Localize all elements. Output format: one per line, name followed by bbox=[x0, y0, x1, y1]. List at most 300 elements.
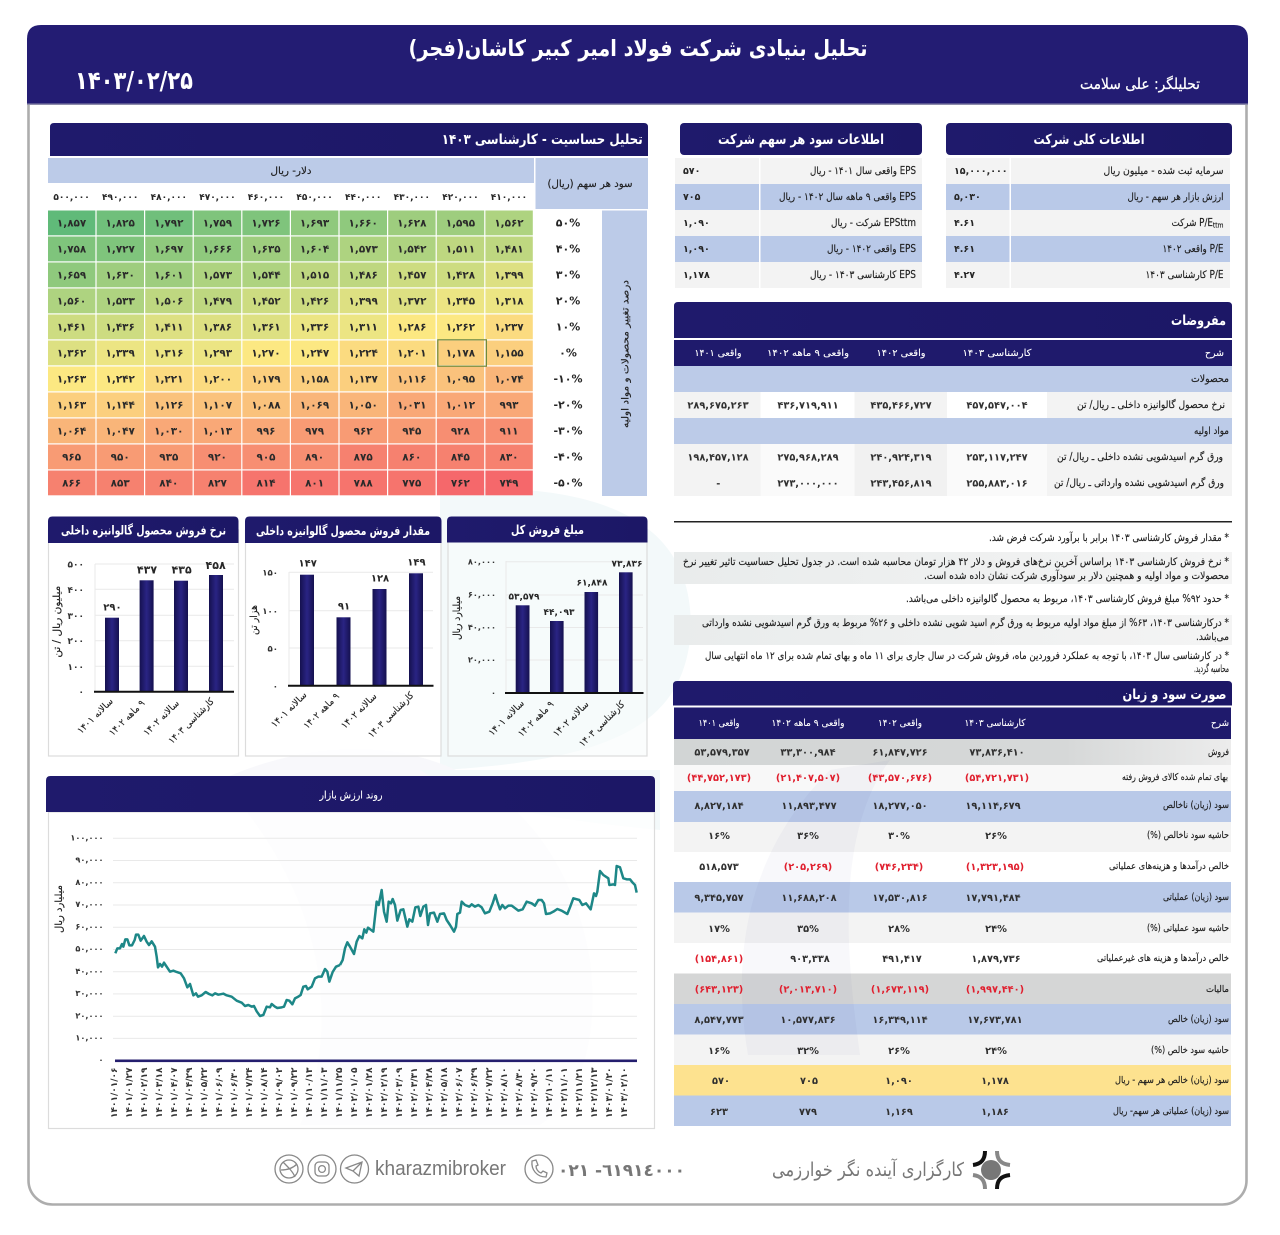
panel: income statement: ۳۳,۳۰۰,۹۸۴ bbox=[780, 748, 836, 758]
panel: income statement: فروش bbox=[1208, 747, 1229, 758]
bar chart: sale price: ۹ ماهه ۱۴۰۲ bbox=[107, 698, 147, 738]
heat map grid: ۱,۲۹۳ bbox=[203, 348, 233, 360]
heat map grid: ۹۶۲ bbox=[354, 426, 373, 438]
panel: income statement: ۲۴% bbox=[985, 924, 1007, 935]
bar chart: sale price bbox=[52, 559, 234, 746]
heading: company info: اطلاعات کلی شرکت bbox=[1034, 132, 1144, 148]
heat map grid: ۱,۵۴۴ bbox=[251, 270, 281, 282]
heading: sensitivity: تحلیل حساسیت - کارشناسی ۱۴۰۳ bbox=[442, 132, 643, 148]
bar chart: sale price: ۲۰۰ bbox=[68, 637, 84, 647]
footer bbox=[275, 1151, 1010, 1189]
heat map grid: ۱,۴۱۱ bbox=[154, 322, 183, 334]
date axis labels: ۱۴۰۱/۰۲/۱۹ bbox=[140, 1067, 150, 1118]
heat map grid: ۱,۸۲۵ bbox=[106, 218, 136, 230]
panel: assumptions: ۴۳۵,۴۶۶,۷۲۷ bbox=[870, 400, 932, 412]
bar chart: sales volume: کارشناسی ۱۴۰۳ bbox=[366, 690, 417, 740]
bar chart: sales volume: سالانه ۱۴۰۱ bbox=[269, 690, 309, 730]
panel: income statement: ۸,۸۲۷,۱۸۴ bbox=[694, 801, 744, 812]
date axis labels: ۱۴۰۲/۰۲/۱۹ bbox=[380, 1067, 390, 1118]
dollar rate column headers: ۴۵۰,۰۰۰ bbox=[296, 193, 333, 203]
bar chart: sales volume: سالانه ۱۴۰۲ bbox=[339, 691, 379, 731]
heat map grid: ۱,۶۰۴ bbox=[300, 244, 329, 256]
panel: income statement: بهای تمام شده کالای فروش رفته bbox=[1122, 772, 1228, 783]
panel: EPS info bbox=[675, 123, 922, 288]
bar chart: sale price: ۴۵۸ bbox=[206, 559, 226, 572]
heat map grid: ۱,۱۶۳ bbox=[57, 400, 87, 412]
date axis labels: ۱۴۰۱/۰۹/۰۲ bbox=[275, 1067, 285, 1118]
heat map grid: ۱,۴۲۶ bbox=[300, 296, 329, 308]
bar chart: sale price: ۱۰۰ bbox=[68, 663, 84, 673]
panel: EPS info: EPSttm شرکت - ریال bbox=[831, 218, 916, 229]
percent row labels: -۱۰% bbox=[553, 372, 583, 386]
panel: income statement: خالص درآمدها و هزینه های غیرعملیاتی bbox=[1097, 952, 1229, 964]
header band bbox=[27, 25, 1248, 105]
heading: sale price: نرخ فروش محصول گالوانیزه داخلی bbox=[61, 522, 226, 538]
heat map grid: ۱,۰۵۰ bbox=[349, 400, 378, 412]
panel: assumptions: ورق گرم اسیدشویی نشده وارداتی ـ ریال/ تن bbox=[1054, 476, 1224, 489]
panel: assumptions: نرخ محصول گالوانیزه داخلی ـ ریال/ تن bbox=[1077, 398, 1225, 411]
heat map grid: ۱,۰۹۵ bbox=[446, 374, 476, 386]
line chart: market value: ۲۰,۰۰۰ bbox=[75, 1010, 104, 1020]
panel: income statement: (۱,۳۲۳,۱۹۵) bbox=[966, 862, 1024, 873]
date axis labels: ۱۴۰۲/۱۱/۰۱ bbox=[560, 1067, 570, 1118]
panel: assumptions: ۴۳۶,۷۱۹,۹۱۱ bbox=[777, 400, 839, 412]
heading: assumptions: مفروضات bbox=[1171, 313, 1226, 329]
bar chart: sale price: ۲۹۰ bbox=[103, 602, 122, 614]
date axis labels: ۱۴۰۲/۰۳/۳۱ bbox=[410, 1067, 420, 1118]
notes block bbox=[674, 521, 1232, 675]
heat map grid: ۱,۱۳۷ bbox=[349, 374, 379, 386]
heat map grid: ۱,۱۰۷ bbox=[203, 400, 233, 412]
panel: income statement: ۶۱,۸۴۷,۷۲۶ bbox=[872, 748, 928, 758]
panel: company general info: سرمایه ثبت شده - میلیون ریال bbox=[1104, 166, 1224, 177]
panel: company general info: ttm bbox=[1213, 222, 1224, 230]
date: ۱۴۰۳/۰۲/۲۵ bbox=[75, 66, 193, 95]
heat map grid: ۱,۵۶۲ bbox=[494, 218, 524, 230]
panel: income statement: ۵۱۸,۵۷۳ bbox=[699, 862, 739, 873]
bar chart: total sales bbox=[452, 556, 644, 749]
heat map grid: ۱,۳۳۶ bbox=[300, 322, 329, 334]
panel: income statement: ۹,۳۴۵,۷۵۷ bbox=[694, 893, 744, 904]
heat map grid: ۱,۵۰۶ bbox=[154, 296, 183, 308]
date axis labels: ۱۴۰۱/۰۱/۲۷ bbox=[125, 1067, 135, 1118]
date axis labels: ۱۴۰۲/۰۸/۱۰ bbox=[500, 1067, 510, 1118]
panel: income statement: سود (زیان) خالص bbox=[1168, 1014, 1229, 1025]
panel: income statement: (۴۳,۵۷۰,۶۷۶) bbox=[868, 773, 932, 784]
date axis labels: ۱۴۰۲/۰۹/۲۰ bbox=[530, 1067, 540, 1118]
heat map grid: ۹۹۶ bbox=[256, 426, 276, 438]
heat map grid: ۱,۶۹۳ bbox=[300, 218, 330, 230]
panel: income statement: (۲۱,۴۰۷,۵۰۷) bbox=[776, 773, 840, 784]
heat map grid: ۹۵۰ bbox=[111, 452, 130, 464]
panel: income statement: (۶۴۳,۱۲۳) bbox=[695, 984, 743, 996]
date axis labels bbox=[110, 1067, 630, 1118]
bar chart: sales volume: ۱۴۷ bbox=[299, 558, 317, 570]
heat map grid: ۱,۷۲۶ bbox=[251, 218, 281, 230]
panel: assumptions: کارشناسی ۱۴۰۳ bbox=[962, 348, 1032, 359]
panel: assumptions: - bbox=[716, 478, 720, 490]
bar chart: total sales: ۶۱,۸۴۸ bbox=[577, 578, 608, 588]
dollar rate column headers: ۴۳۰,۰۰۰ bbox=[394, 193, 430, 203]
percent row labels: ۳۰% bbox=[556, 268, 580, 282]
panel: income statement: ۱,۱۷۸ bbox=[981, 1076, 1009, 1087]
panel: income statement: ۱۹,۱۱۴,۶۷۹ bbox=[965, 801, 1021, 812]
bar chart: sales volume: ۹ ماهه ۱۴۰۲ bbox=[302, 691, 342, 731]
heat map grid: ۱,۳۶۲ bbox=[57, 348, 87, 360]
heat map grid: ۱,۲۰۰ bbox=[203, 374, 232, 386]
heat map grid: ۱,۶۵۹ bbox=[57, 270, 87, 282]
heat map grid: ۱,۵۳۳ bbox=[106, 296, 136, 308]
date axis labels: ۱۴۰۲/۰۱/۲۸ bbox=[365, 1067, 375, 1118]
bar chart: sale price: ۰ bbox=[78, 688, 84, 698]
date axis labels: ۱۴۰۳/۰۲/۱۰ bbox=[620, 1067, 630, 1118]
heat map grid: ۱,۲۰۱ bbox=[397, 348, 426, 360]
notes block: می‌باشد. bbox=[1196, 632, 1229, 643]
panel: income statement: کارشناسی ۱۴۰۳ bbox=[965, 718, 1026, 729]
percent row labels: ۴۰% bbox=[556, 242, 580, 256]
heat map grid: ۱,۱۴۴ bbox=[106, 400, 135, 412]
date axis labels: ۱۴۰۲/۰۷/۲۲ bbox=[485, 1067, 495, 1118]
line chart: market value: ۷۰,۰۰۰ bbox=[75, 899, 104, 909]
heading: total sales: مبلغ فروش کل bbox=[511, 522, 584, 537]
dollar rate column headers: ۵۰۰,۰۰۰ bbox=[53, 193, 90, 203]
panel: income statement: ۱۸,۲۷۷,۰۵۰ bbox=[872, 801, 928, 812]
panel: income statement: ۱۷,۶۷۳,۷۸۱ bbox=[967, 1015, 1023, 1026]
heat map grid: ۹۶۵ bbox=[62, 452, 82, 464]
icon: broker logo bbox=[973, 1151, 1010, 1189]
date axis labels: ۱۴۰۲/۰۸/۳۰ bbox=[515, 1067, 525, 1118]
line chart: market value: ۴۰,۰۰۰ bbox=[75, 966, 104, 976]
panel: assumptions: مواد اولیه bbox=[1194, 426, 1229, 437]
bar chart: total sales: ۸۰,۰۰۰ bbox=[468, 556, 496, 566]
heat map grid: ۱,۲۲۴ bbox=[349, 348, 378, 360]
date axis labels: ۱۴۰۱/۰۹/۲۲ bbox=[290, 1067, 300, 1118]
date axis labels: ۱۴۰۲/۱۱/۲۱ bbox=[575, 1067, 585, 1118]
bar chart: total sales: میلیارد ریال bbox=[452, 596, 463, 640]
heat map grid bbox=[48, 210, 533, 495]
dollar rate column headers bbox=[53, 193, 527, 203]
bar chart: sales volume: ۵۰ bbox=[268, 644, 278, 654]
date axis labels: ۱۴۰۳/۰۱/۲۰ bbox=[605, 1067, 615, 1118]
side axis label bbox=[602, 210, 647, 496]
bar chart: total sales: ۰ bbox=[491, 688, 496, 698]
date axis labels: ۱۴۰۱/۰۶/۳۰ bbox=[230, 1067, 240, 1118]
website handle: kharazmibroker bbox=[375, 1158, 506, 1180]
panel: total sales chart bbox=[447, 516, 648, 756]
icon: phone bbox=[525, 1155, 553, 1183]
notes block: * درکارشناسی ۱۴۰۳، ۶۳% از مبلغ مواد اولیه مربوط به ورق گرم اسید شویی نشده داخلی و ۲۶% مربوط به ورق گرم اسیدشویی نشده وارداتی bbox=[702, 616, 1229, 629]
heat map grid: ۱,۰۷۴ bbox=[494, 374, 524, 386]
date axis labels: ۱۴۰۱/۰۶/۰۹ bbox=[215, 1067, 225, 1118]
percent row labels bbox=[553, 216, 583, 490]
bar chart: sale price: ۵۰۰ bbox=[68, 560, 84, 570]
bar chart: sales volume: ۱۰۰ bbox=[262, 607, 278, 617]
panel: income statement: (۵۴,۷۲۱,۷۳۱) bbox=[965, 773, 1029, 784]
notes block: محصولات و مواد اولیه و همچنین دلار بر سودآوری شرکت نشان داده شده است. bbox=[924, 569, 1229, 582]
bar chart: sales volume: ۱۵۰ bbox=[262, 568, 278, 578]
panel: assumptions: ۲۴۰,۹۲۴,۳۱۹ bbox=[870, 452, 932, 464]
panel: sale price chart bbox=[48, 516, 238, 756]
heat map grid: ۱,۴۷۹ bbox=[203, 296, 233, 308]
bar chart: sales volume: ۱۲۸ bbox=[371, 574, 389, 584]
heat map grid: ۱,۵۹۵ bbox=[446, 218, 476, 230]
bar chart: total sales: کارشناسی ۱۴۰۳ bbox=[577, 699, 628, 749]
heat map grid: ۸۴۵ bbox=[451, 452, 471, 464]
bar chart: sales volume: ۹۱ bbox=[338, 602, 350, 612]
line chart: market value: ۵۰,۰۰۰ bbox=[75, 944, 104, 954]
panel: income statement: ۵۷۰ bbox=[712, 1076, 730, 1087]
panel: income statement: ۱۰,۵۷۷,۸۳۶ bbox=[780, 1015, 836, 1026]
heat map grid: ۱,۶۳۵ bbox=[251, 244, 281, 256]
panel: EPS info: EPS واقعی سال ۱۴۰۱ - ریال bbox=[810, 166, 916, 177]
heat map grid: ۱,۶۶۶ bbox=[203, 244, 232, 256]
panel: company general info: P/E کارشناسی ۱۴۰۳ bbox=[1146, 270, 1224, 281]
heat map grid: ۱,۷۵۹ bbox=[203, 218, 233, 230]
line chart: market value: ۰ bbox=[98, 1054, 104, 1064]
heat map grid: ۸۶۰ bbox=[402, 452, 421, 464]
bar chart: total sales: ۶۰,۰۰۰ bbox=[468, 590, 496, 600]
date axis labels: ۱۴۰۲/۰۵/۱۸ bbox=[440, 1067, 450, 1118]
heat map grid: ۱,۳۶۱ bbox=[251, 322, 281, 334]
heat map grid: ۸۲۷ bbox=[208, 478, 228, 490]
panel: assumptions: محصولات bbox=[1191, 374, 1229, 385]
heat map grid: ۱,۲۲۱ bbox=[154, 374, 183, 386]
date axis labels: ۱۴۰۱/۱۱/۰۳ bbox=[320, 1067, 330, 1118]
heat map grid: ۱,۳۹۹ bbox=[494, 270, 524, 282]
panel: EPS info: EPS واقعی ۱۴۰۲ - ریال bbox=[827, 244, 916, 255]
panel: assumptions: ۲۵۵,۸۸۳,۰۱۶ bbox=[966, 478, 1028, 490]
bar chart: sale price: ۴۳۵ bbox=[172, 564, 192, 576]
panel: income statement: ۱,۸۷۹,۷۳۶ bbox=[971, 954, 1021, 965]
notes block: * نرخ فروش کارشناسی ۱۴۰۳ براساس آخرین نرخ‌های فروش و دلار ۴۲ هزار تومان محاسبه شده است. در جدول تحلیل حساسیت تاثیر تغییر نرخ bbox=[683, 555, 1229, 568]
bar chart: sales volume: هزار تن bbox=[249, 605, 260, 635]
notes block: * حدود ۹۲% مبلغ فروش کارشناسی ۱۴۰۳، مربوط به محصول گالوانیزه داخلی می‌باشد. bbox=[906, 592, 1229, 605]
panel: income statement: ۴۹۱,۴۱۷ bbox=[882, 954, 922, 965]
panel: income statement: ۸,۵۴۷,۷۷۳ bbox=[694, 1015, 744, 1026]
dollar rate column headers: ۴۸۰,۰۰۰ bbox=[151, 193, 187, 203]
bar chart: total sales: ۵۳,۵۷۹ bbox=[509, 592, 540, 602]
panel: sensitivity analysis bbox=[48, 123, 648, 496]
icon: telegram bbox=[340, 1155, 368, 1183]
panel: income statement: واقعی ۱۴۰۲ bbox=[878, 718, 922, 729]
heat map grid: ۱,۰۶۴ bbox=[57, 426, 86, 438]
bar chart: sales volume: ۱۴۹ bbox=[407, 558, 426, 568]
panel: income statement: سود (زیان) عملیاتی هر سهم- ریال bbox=[1113, 1106, 1229, 1117]
panel: company general info: ۴.۶۱ bbox=[954, 244, 975, 255]
panel: assumptions: ۲۸۹,۶۷۵,۲۶۳ bbox=[687, 400, 749, 412]
panel: EPS info: EPS واقعی ۹ ماهه سال ۱۴۰۲ - ریال bbox=[779, 192, 916, 203]
bar chart: sale price: میلیون ریال / تن bbox=[52, 586, 63, 658]
percent row labels: ۱۰% bbox=[556, 320, 580, 334]
panel: company general info: شرکت bbox=[1172, 218, 1199, 229]
panel: income statement: خالص درآمدها و هزینه‌های عملیاتی bbox=[1109, 860, 1229, 872]
heat map grid: ۸۶۶ bbox=[62, 478, 81, 490]
heat map grid: ۱,۵۷۳ bbox=[349, 244, 379, 256]
panel: EPS info: ۷۰۵ bbox=[683, 192, 701, 203]
date axis labels: ۱۴۰۲/۰۱/۰۵ bbox=[350, 1067, 360, 1118]
panel: assumptions bbox=[674, 302, 1232, 496]
bar chart: sale price: کارشناسی ۱۴۰۳ bbox=[167, 696, 217, 746]
percent row labels: -۵۰% bbox=[553, 476, 583, 490]
heading: sales volume: مقدار فروش محصول گالوانیزه داخلی bbox=[256, 523, 430, 538]
broker name: کارگزاری آینده نگر خوارزمی bbox=[772, 1157, 965, 1181]
heat map grid: ۱,۷۵۸ bbox=[57, 244, 87, 256]
line chart: market value: ۱۰,۰۰۰ bbox=[75, 1032, 104, 1042]
heat map grid: ۱,۴۸۱ bbox=[494, 244, 524, 256]
line chart: market value: ۹۰,۰۰۰ bbox=[75, 854, 104, 864]
line chart: market value: ۶۰,۰۰۰ bbox=[75, 922, 104, 932]
panel: income statement: ۱۶% bbox=[708, 831, 730, 842]
bar chart: total sales: ۴۰,۰۰۰ bbox=[468, 622, 496, 632]
panel: income statement: حاشیه سود خالص (%) bbox=[1151, 1045, 1229, 1056]
panel: income statement: ۱۷% bbox=[708, 924, 730, 935]
heading: market value: روند ارزش بازار bbox=[319, 790, 382, 802]
heat map grid: ۷۴۹ bbox=[499, 478, 519, 490]
panel: company general info: ۴.۲۷ bbox=[954, 270, 975, 281]
heat map grid: ۱,۰۴۷ bbox=[106, 426, 136, 438]
panel: income statement: ۷۷۹ bbox=[799, 1107, 817, 1118]
panel: income statement: ۱,۱۶۹ bbox=[885, 1107, 913, 1118]
heat map grid: ۹۴۵ bbox=[402, 426, 422, 438]
panel: assumptions: ۲۷۳,۰۰۰,۰۰۰ bbox=[777, 478, 839, 490]
heat map grid: ۱,۵۷۳ bbox=[203, 270, 233, 282]
title: تحلیل بنیادی شرکت فولاد امیر کبیر کاشان(فجر) bbox=[408, 36, 868, 62]
date axis labels: ۱۴۰۱/۰۱/۰۶ bbox=[110, 1067, 120, 1118]
date axis labels: ۱۴۰۱/۱۱/۲۵ bbox=[335, 1067, 345, 1118]
heat map grid: ۹۱۱ bbox=[499, 426, 519, 438]
heat map grid: ۹۲۰ bbox=[208, 452, 227, 464]
notes block: * در کارشناسی سال ۱۴۰۳، با توجه به عملکرد فروردین ماه، فروش شرکت در سال جاری برای ۱۱ ماه و بهای تمام شده برای ۱۲ ماه انتهایی سال bbox=[705, 651, 1229, 662]
panel: company general info: ۴.۶۱ bbox=[954, 218, 975, 229]
panel: income statement: ۱,۰۹۰ bbox=[885, 1076, 913, 1087]
date axis labels: ۱۴۰۲/۰۶/۰۷ bbox=[455, 1067, 465, 1118]
analyst: تحلیلگر: علی سلامت bbox=[1080, 75, 1200, 93]
panel: company general info: ۵,۰۳۰ bbox=[954, 192, 981, 203]
heat map grid: ۸۵۳ bbox=[111, 478, 130, 490]
percent row labels: ۲۰% bbox=[556, 294, 580, 308]
panel: income statement: ۳۶% bbox=[797, 831, 819, 842]
line chart: market value bbox=[54, 832, 637, 1118]
heat map grid: ۱,۷۲۷ bbox=[106, 244, 136, 256]
heat map grid: ۱,۳۷۲ bbox=[397, 296, 427, 308]
heat map grid: ۱,۶۰۱ bbox=[154, 270, 183, 282]
bar chart: sales volume bbox=[249, 558, 434, 740]
panel: income statement: ۱۷,۵۳۰,۸۱۶ bbox=[872, 893, 928, 904]
panel: income statement: ۲۶% bbox=[888, 1046, 910, 1057]
icon: dribbble bbox=[275, 1155, 303, 1183]
panel: income statement: ۲۶% bbox=[985, 831, 1007, 842]
panel: company general info: P/E bbox=[1199, 218, 1215, 229]
heat map grid: ۱,۴۲۸ bbox=[446, 270, 476, 282]
panel: income statement: واقعی ۹ ماهه ۱۴۰۲ bbox=[772, 718, 844, 729]
panel: assumptions: ۲۴۳,۴۵۶,۸۱۹ bbox=[870, 478, 932, 490]
panel: income statement: ۳۰% bbox=[888, 831, 910, 842]
bar chart: total sales: ۹ ماهه ۱۴۰۲ bbox=[516, 699, 556, 739]
date axis labels: ۱۴۰۱/۰۴/۲۹ bbox=[185, 1067, 195, 1118]
heat map grid: ۱,۰۱۲ bbox=[446, 400, 476, 412]
panel: income statement: ۳۵% bbox=[797, 924, 819, 935]
heat map grid: ۱,۳۳۹ bbox=[106, 348, 136, 360]
bar chart: total sales: ۴۴,۰۹۳ bbox=[544, 608, 575, 618]
dollar rate column headers: ۴۹۰,۰۰۰ bbox=[102, 193, 138, 203]
panel: income statement: (۷۴۶,۲۳۴) bbox=[875, 862, 923, 873]
heat map grid: ۱,۶۶۰ bbox=[349, 218, 378, 230]
heat map grid: ۹۹۳ bbox=[499, 400, 519, 412]
heat map grid: ۱,۲۸۶ bbox=[397, 322, 426, 334]
heat map grid: ۸۴۰ bbox=[159, 478, 178, 490]
row backgrounds bbox=[674, 739, 1231, 1126]
heat map grid: ۱,۲۴۲ bbox=[106, 374, 136, 386]
bar chart: sales volume: ۰ bbox=[273, 682, 278, 692]
dollar rate column headers: ۴۷۰,۰۰۰ bbox=[199, 193, 236, 203]
panel: income statement: سود (زیان) ناخالص bbox=[1163, 800, 1229, 811]
heat map grid: ۱,۷۹۲ bbox=[154, 218, 184, 230]
heat map grid: ۱,۱۷۹ bbox=[251, 374, 281, 386]
heat map grid: ۱,۱۵۸ bbox=[300, 374, 330, 386]
panel: assumptions: شرح bbox=[1205, 348, 1224, 359]
panel: company general info: ۱۵,۰۰۰,۰۰۰ bbox=[954, 166, 1008, 177]
heat map grid: ۱,۳۸۶ bbox=[203, 322, 232, 334]
heat map grid: ۱,۳۱۶ bbox=[154, 348, 183, 360]
heat map grid: ۸۱۴ bbox=[256, 478, 276, 490]
panel: assumptions: ۴۵۷,۵۴۷,۰۰۴ bbox=[966, 400, 1028, 412]
panel: income statement: (۴۴,۷۵۲,۱۷۳) bbox=[687, 773, 751, 784]
highlighted base case cell bbox=[438, 340, 486, 366]
heat map grid: ۹۰۵ bbox=[256, 452, 276, 464]
bar chart: total sales: سالانه ۱۴۰۱ bbox=[487, 698, 527, 738]
panel: income statement: ۱,۱۸۶ bbox=[981, 1107, 1009, 1118]
panel: assumptions: ۱۹۸,۴۵۷,۱۲۸ bbox=[687, 452, 749, 464]
panel: income statement: حاشیه سود عملیاتی (%) bbox=[1147, 923, 1229, 934]
panel: income statement: شرح bbox=[1211, 718, 1229, 729]
line chart: market value: ۸۰,۰۰۰ bbox=[75, 877, 104, 887]
heat map grid: ۱,۳۱۸ bbox=[494, 296, 524, 308]
heat map grid: ۱,۵۱۵ bbox=[300, 270, 330, 282]
date axis labels: ۱۴۰۱/۰۵/۲۲ bbox=[200, 1067, 210, 1118]
panel: EPS info: ۱,۰۹۰ bbox=[683, 244, 710, 255]
heading: income statement: صورت سود و زیان bbox=[1122, 687, 1226, 703]
panel: income statement: ۹۰۳,۳۳۸ bbox=[790, 954, 830, 965]
heat map grid: ۸۹۰ bbox=[305, 452, 324, 464]
panel: sales volume chart bbox=[245, 516, 442, 756]
line chart: market value: ۳۰,۰۰۰ bbox=[75, 988, 104, 998]
date axis labels: ۱۴۰۱/۰۸/۱۴ bbox=[260, 1067, 270, 1118]
panel: income statement: (۲۰۵,۲۶۹) bbox=[784, 862, 832, 873]
heat map grid: ۱,۴۳۶ bbox=[106, 322, 135, 334]
heat map grid: ۱,۰۳۱ bbox=[397, 400, 426, 412]
date axis labels: ۱۴۰۲/۰۶/۲۹ bbox=[470, 1067, 480, 1118]
bar chart: total sales: سالانه ۱۴۰۲ bbox=[551, 699, 591, 739]
percent row labels: -۴۰% bbox=[553, 450, 583, 464]
panel: income statement: سود (زیان) عملیاتی bbox=[1163, 892, 1229, 903]
date axis labels: ۱۴۰۱/۰۳/۱۸ bbox=[155, 1067, 165, 1118]
heat map grid: ۱,۶۲۸ bbox=[397, 218, 427, 230]
heat map grid: ۱,۶۳۰ bbox=[106, 270, 135, 282]
panel: income statement: سود (زیان) خالص هر سهم - ریال bbox=[1115, 1075, 1229, 1086]
panel: income statement: ۱۶% bbox=[708, 1046, 730, 1057]
panel: income statement: (۱,۶۷۳,۱۱۹) bbox=[871, 984, 929, 996]
percent row labels: ۵۰% bbox=[556, 216, 580, 230]
heat map grid: ۹۷۹ bbox=[305, 426, 325, 438]
bar chart: sale price: ۴۰۰ bbox=[68, 586, 84, 596]
heat map grid: ۱,۲۷۰ bbox=[251, 348, 281, 360]
notes block: * مقدار فروش کارشناسی ۱۴۰۳ برابر با برآورد شرکت فرض شد. bbox=[989, 531, 1229, 544]
heat map grid: ۱,۴۵۲ bbox=[251, 296, 281, 308]
panel: assumptions: واقعی ۱۴۰۱ bbox=[694, 348, 742, 359]
line chart: market value: میلیارد ریال bbox=[54, 885, 65, 933]
icon: instagram bbox=[308, 1155, 336, 1183]
heat map grid: ۱,۱۲۶ bbox=[154, 400, 183, 412]
